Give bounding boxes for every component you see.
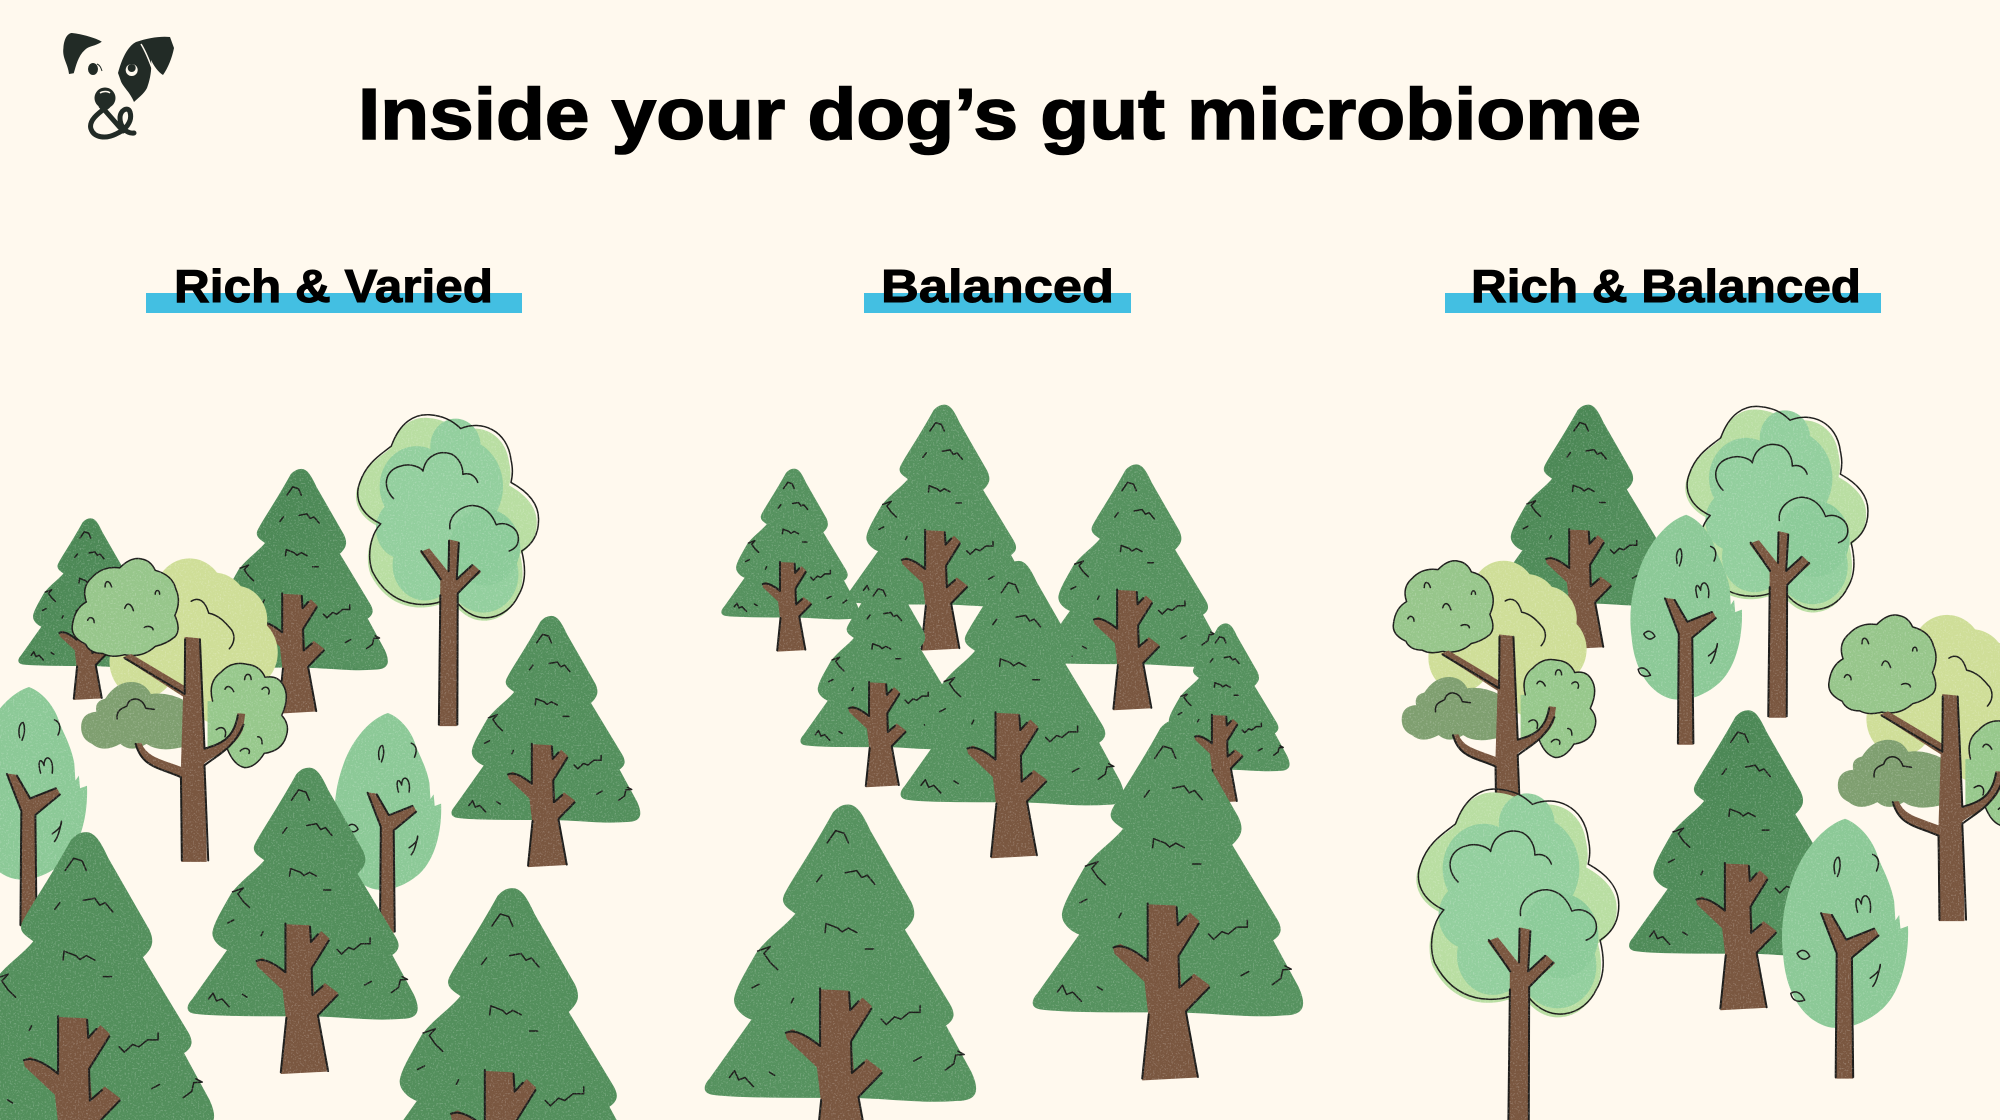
pine tree centre (902, 562, 1123, 858)
pine tree right (452, 617, 639, 867)
leaf tree upper (1630, 515, 1742, 744)
mixed tree (72, 558, 287, 861)
round oak tree front (1416, 789, 1619, 1120)
heading: Balanced: Balanced (881, 260, 1114, 312)
pine tree back centre (847, 406, 1030, 650)
heading: Rich & Balanced: Rich & Balanced (1471, 260, 1861, 312)
leaf tree left (0, 687, 87, 926)
pine tree mid left (801, 574, 961, 787)
pine tree small left (722, 470, 858, 651)
pine tree large right (1034, 721, 1302, 1080)
round oak tree (356, 415, 539, 726)
pine tree centre (189, 769, 417, 1074)
panel: Balanced forest (706, 406, 1302, 1120)
leaf tree lower (1782, 819, 1908, 1078)
pine tree back centre (205, 470, 387, 713)
heading: Rich & Varied: Rich & Varied (174, 260, 493, 312)
pine tree large left (706, 805, 975, 1120)
pine tree small right (1155, 624, 1289, 802)
round oak tree back (1685, 406, 1868, 717)
mixed tree left (1393, 561, 1596, 846)
pine tree bottom right (372, 889, 638, 1120)
pine tree bottom left (0, 833, 213, 1120)
panel: Rich & Balanced forest (1393, 406, 2000, 1120)
title: Inside your dog’s gut microbiome (358, 75, 1641, 155)
pine tree back left (19, 519, 154, 699)
pine tree back (1492, 406, 1674, 649)
panel: Rich & Varied forest (0, 415, 639, 1120)
pine tree front (1630, 711, 1853, 1010)
mixed tree right (1829, 615, 2000, 921)
leaf tree centre (335, 713, 441, 932)
pine tree back right (1039, 465, 1222, 710)
icon: dog and ampersand logo (63, 33, 174, 137)
